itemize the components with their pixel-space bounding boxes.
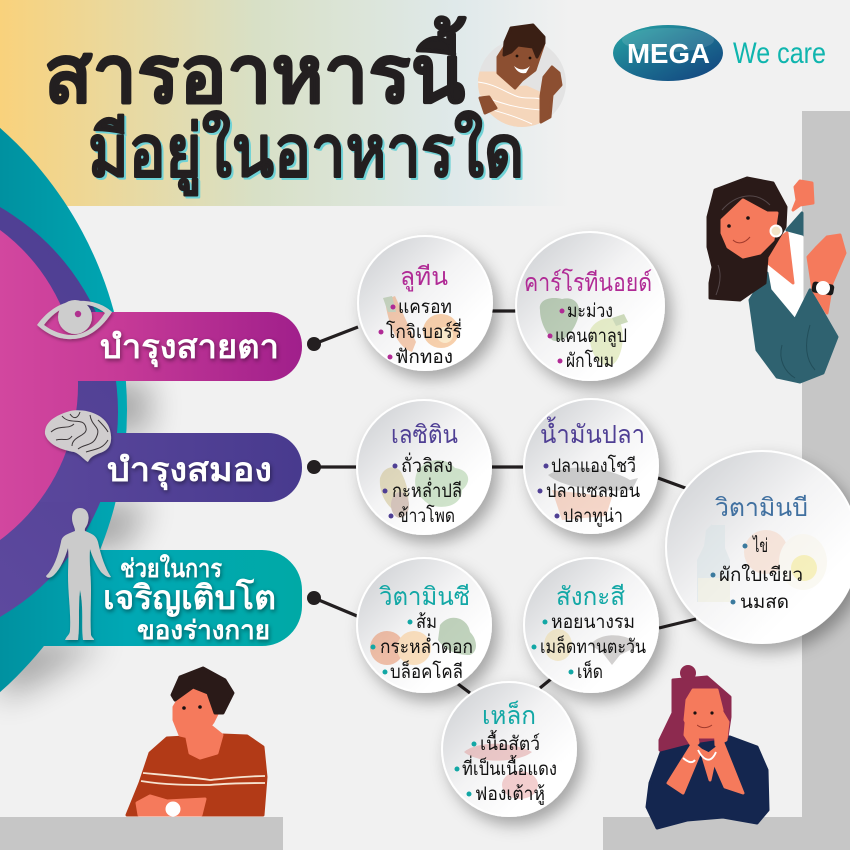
food list <box>538 454 640 527</box>
food list: กะหล่ำปลี <box>392 477 462 502</box>
food list <box>532 612 646 683</box>
nutrient: iron <box>442 682 576 816</box>
bubble <box>516 232 664 380</box>
pill label: growth line 3: ของร่างกาย <box>137 615 270 645</box>
food list: ปลาแซลมอน <box>546 481 640 502</box>
connector lines <box>314 311 696 693</box>
food image <box>548 468 638 520</box>
bubble <box>357 400 491 534</box>
food image <box>370 618 476 665</box>
pill label: growth line 2: เจริญเติบโต <box>103 578 276 617</box>
nutrient: vitamin C <box>357 558 491 692</box>
heading: วิตามินบี <box>715 494 808 522</box>
header gradient band <box>0 0 570 206</box>
illustration: woman at bottom right <box>647 665 768 828</box>
food list: ฟองเต้าหู้ <box>475 784 545 805</box>
bubble <box>666 451 850 643</box>
heading: เลซิติน <box>391 421 458 449</box>
food list: ปลาแองโชวี <box>551 454 636 477</box>
food list <box>548 301 627 372</box>
food list: ผักใบเขียว <box>719 564 803 586</box>
food list: ส้ม <box>416 612 437 633</box>
bubble <box>442 682 576 816</box>
nutrient: lecithin <box>357 400 491 534</box>
food image <box>697 524 827 602</box>
ledge: bottom right <box>603 817 850 850</box>
icon: eye <box>37 300 112 339</box>
illustration: man at bottom left <box>127 668 266 816</box>
bubble <box>524 399 658 533</box>
food list: บล็อคโคลี <box>390 659 463 683</box>
heading: ลูทีน <box>400 263 448 292</box>
teal circle <box>0 33 127 787</box>
food list <box>378 297 462 368</box>
food image <box>380 460 468 518</box>
food list: ผักโขม <box>566 349 614 372</box>
food list <box>370 612 473 683</box>
logo ellipse <box>613 25 723 81</box>
food list: แคนตาลูป <box>555 326 627 347</box>
nutrient: vitamin B <box>666 451 850 643</box>
food list: ปลาทูน่า <box>563 506 623 527</box>
food list: นมสด <box>740 592 789 613</box>
pill label: growth line 1: ช่วยในการ <box>120 553 222 583</box>
ledge: bottom left <box>0 817 283 850</box>
food list: ไข่ <box>752 535 768 557</box>
logo tagline: We care <box>733 37 826 70</box>
heading: วิตามินซี <box>379 583 470 611</box>
pill: brain <box>40 433 302 502</box>
nutrient: lutein <box>358 236 492 370</box>
pill: eyes <box>0 312 302 381</box>
illustration: waving man in circle <box>476 25 566 128</box>
heading: คาร์โรทีนอยด์ <box>524 268 652 297</box>
logo: MEGA We care <box>613 25 826 81</box>
food list: ข้าวโพด <box>398 504 455 527</box>
icon: brain <box>45 410 111 462</box>
food list: เนื้อสัตว์ <box>480 730 540 755</box>
purple circle <box>0 175 118 649</box>
illustration: woman peeking from wall <box>708 178 845 382</box>
bubble <box>358 236 492 370</box>
food image <box>540 298 628 366</box>
connector dots <box>307 337 321 605</box>
food list: แครอท <box>398 297 452 318</box>
logo word: MEGA <box>627 38 710 69</box>
food list: หอยนางรม <box>551 612 635 633</box>
bubble <box>357 558 491 692</box>
nutrient: carotenoid <box>516 232 664 380</box>
icon: human body <box>46 508 111 640</box>
food list: เห็ด <box>577 659 603 683</box>
food image <box>544 629 640 665</box>
nutrient: zinc <box>524 558 658 692</box>
food list: มะม่วง <box>567 301 613 322</box>
heading: น้ำมันปลา <box>540 416 645 449</box>
food list <box>454 730 557 805</box>
food list: ฟักทอง <box>395 347 453 368</box>
food list: ถั่วลิสง <box>401 452 453 477</box>
bubble <box>524 558 658 692</box>
food list <box>382 452 462 527</box>
pill label: eyes: บำรุงสายตา <box>100 328 279 368</box>
heading: สังกะสี <box>556 583 625 611</box>
soft shadow behind circles <box>0 381 150 700</box>
food list <box>710 535 803 613</box>
pink circle <box>0 192 78 578</box>
title line 1: สารอาหารนี้ <box>44 16 467 119</box>
food list: กระหล่ำดอก <box>380 633 473 658</box>
nutrient: fish oil <box>524 399 658 533</box>
food list: โกจิเบอร์รี่ <box>386 318 462 343</box>
food list: ที่เป็นเนื้อแดง <box>462 755 557 780</box>
food image <box>383 296 459 352</box>
wall: right <box>802 111 850 850</box>
food image <box>464 744 538 799</box>
pill label: brain: บำรุงสมอง <box>107 451 272 491</box>
heading: เหล็ก <box>482 700 536 730</box>
title line 2: มีอยู่ในอาหารใด <box>88 109 524 197</box>
food list: เมล็ดทานตะวัน <box>540 634 646 658</box>
pill: growth <box>0 550 302 646</box>
